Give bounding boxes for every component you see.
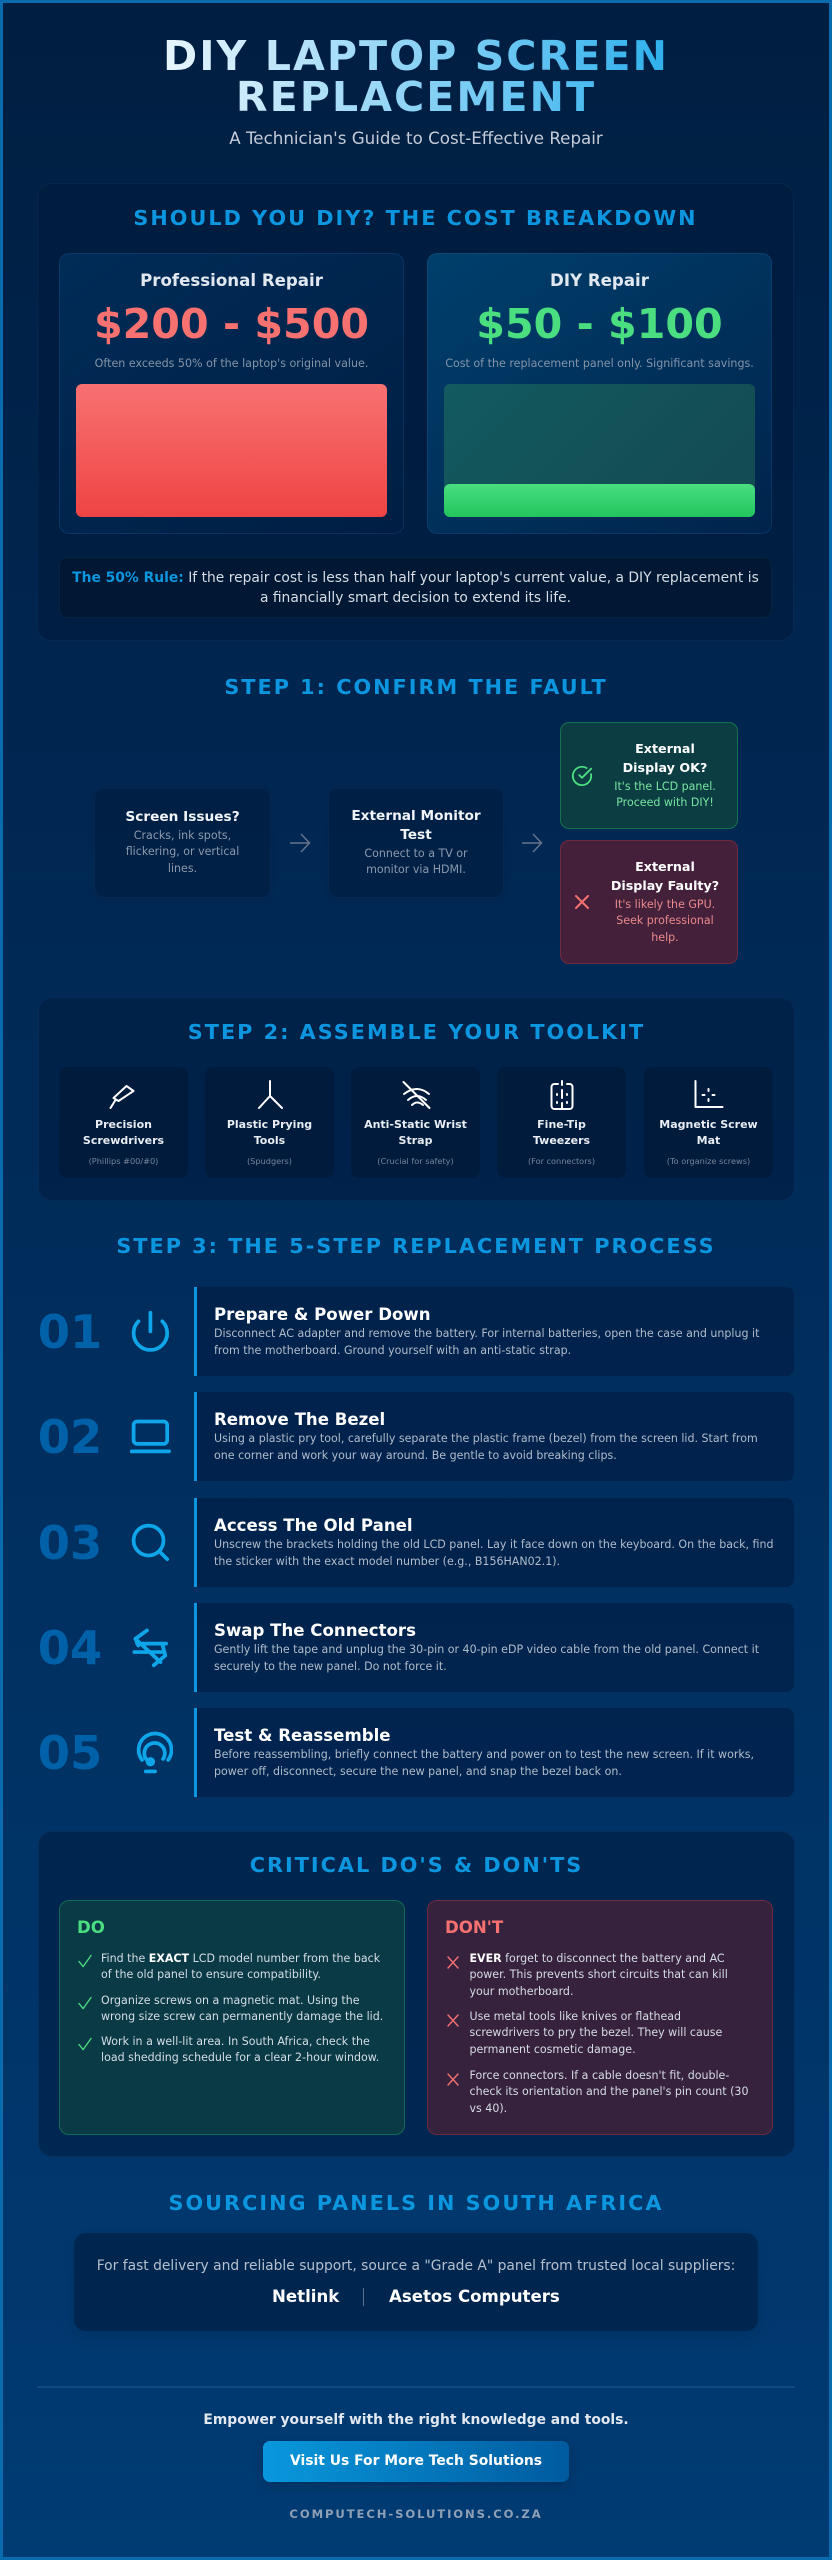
process step 4 xyxy=(38,1603,794,1692)
icon: cross xyxy=(575,895,589,909)
panel: suppliers xyxy=(74,2233,758,2331)
flow text: external monitor test: Test xyxy=(400,827,432,843)
do text 1: of the old panel to ensure compatibility. xyxy=(101,1968,321,1981)
panel: toolkit xyxy=(38,997,795,1201)
heading: step 2: STEP 2: ASSEMBLE YOUR TOOLKIT xyxy=(188,1020,645,1044)
icon: power xyxy=(132,1310,170,1352)
step description: Disconnect AC adapter and remove the battery. For internal batteries, open the case and unplug it xyxy=(214,1327,759,1340)
card: diy repair xyxy=(427,253,772,534)
tool name: Precision xyxy=(95,1118,152,1131)
price: diy: $50 - $100 xyxy=(476,300,723,348)
icon: connectors xyxy=(132,1628,168,1668)
do item 3 xyxy=(78,2034,398,2068)
step description xyxy=(214,1538,774,1568)
arrow xyxy=(522,834,542,852)
don't text 1 xyxy=(470,1951,728,2001)
icon: check circle xyxy=(572,766,592,786)
outcome text: display faulty: Display Faulty? xyxy=(611,878,719,893)
number: 04 xyxy=(38,1621,102,1675)
tool name: Plastic Prying xyxy=(227,1118,312,1131)
icon: wrist strap xyxy=(402,1081,430,1109)
icon: cross xyxy=(447,2014,459,2027)
tool: precision screwdrivers xyxy=(59,1067,188,1178)
do text 3 xyxy=(101,2034,379,2067)
icon: check xyxy=(78,1954,92,1968)
outcome text: display faulty: External xyxy=(635,859,695,874)
flow text: screen issues: lines. xyxy=(168,862,197,875)
icon: magnifier xyxy=(132,1524,170,1562)
card: professional repair xyxy=(59,253,404,534)
step description: Before reassembling, briefly connect the battery and power on to test the new screen. If it works, xyxy=(214,1748,754,1761)
do text 2: Organize screws on a magnetic mat. Using the xyxy=(101,1994,360,2007)
icon: laptop xyxy=(130,1420,171,1454)
step title: Swap The Connectors xyxy=(214,1620,416,1640)
don't text 2: permanent cosmetic damage. xyxy=(470,2043,636,2056)
tool name: Magnetic Screw xyxy=(659,1118,758,1131)
icon: screw mat xyxy=(694,1080,724,1108)
number: 01 xyxy=(38,1305,102,1359)
step description xyxy=(214,1432,758,1462)
outcome text: display ok: Proceed with DIY! xyxy=(616,796,714,809)
flow text: screen issues xyxy=(125,809,240,875)
bar: diy cost xyxy=(444,384,755,517)
bar: professional cost xyxy=(76,384,387,517)
outcome text: display ok: External xyxy=(635,741,695,756)
icon: prying tool xyxy=(258,1080,283,1109)
note: professional: Often exceeds 50% of the laptop's original value. xyxy=(95,357,368,370)
don't item 3 xyxy=(446,2068,766,2118)
tool: magnetic screw mat xyxy=(644,1067,773,1178)
do item 1 xyxy=(78,1952,380,1981)
tool: plastic prying tools xyxy=(205,1067,334,1178)
callout: 50% rule xyxy=(59,557,772,618)
tool name: Mat xyxy=(697,1134,720,1147)
don't text 3: vs 40). xyxy=(470,2102,507,2115)
sourcing text: For fast delivery and reliable support, source a "Grade A" panel from trusted local suppliers: xyxy=(97,2258,735,2274)
tagline: Empower yourself with the right knowledge and tools. xyxy=(203,2412,629,2428)
outcome text: display faulty: It's likely the GPU. xyxy=(615,898,715,911)
flowchart: confirm the fault xyxy=(95,722,738,964)
don't heading: DON'T xyxy=(445,1918,503,1937)
tool note: (Crucial for safety) xyxy=(377,1156,454,1166)
callout: 50% rule: The 50% Rule: If the repair cost is less than half your laptop's current value, a DIY replacement is xyxy=(72,570,759,586)
process step 3 xyxy=(38,1498,794,1587)
arrow xyxy=(290,834,310,852)
step title: Prepare & Power Down xyxy=(214,1304,431,1324)
tool note: (Spudgers) xyxy=(247,1156,292,1166)
tool name: Screwdrivers xyxy=(83,1134,164,1147)
number: 03 xyxy=(38,1516,102,1570)
supplier: asetos computers: Asetos Computers xyxy=(389,2287,560,2306)
number: 02 xyxy=(38,1410,102,1464)
icon: tweezers xyxy=(550,1080,574,1110)
flow text: screen issues: flickering, or vertical xyxy=(126,845,239,858)
step title: Remove The Bezel xyxy=(214,1410,385,1428)
tool note: (Phillips #00/#0) xyxy=(89,1156,158,1166)
outcome: display ok xyxy=(560,722,738,829)
do text 2: wrong size screw can permanently damage the lid. xyxy=(101,2010,383,2023)
tool name: Tools xyxy=(254,1134,285,1147)
website: COMPUTECH-SOLUTIONS.CO.ZA xyxy=(289,2507,543,2521)
bar fill: diy xyxy=(444,484,755,517)
footer xyxy=(37,2386,795,2526)
tool: anti-static wrist strap xyxy=(351,1067,480,1178)
outcome text: display ok xyxy=(614,741,716,809)
don't item 2 xyxy=(446,2009,766,2059)
step title: Test & Reassemble xyxy=(214,1726,391,1744)
title: REPLACEMENT xyxy=(236,73,596,121)
flow text: screen issues: Screen Issues? xyxy=(125,809,240,825)
flow text: external monitor test: External Monitor xyxy=(351,808,481,824)
tool name xyxy=(83,1118,164,1147)
do item 2 xyxy=(78,1994,383,2023)
tool name: Strap xyxy=(399,1134,432,1147)
outcome text: display faulty xyxy=(611,859,719,944)
icon: cross xyxy=(447,2073,459,2086)
tool name xyxy=(364,1118,467,1147)
step description: one corner and work your way around. Be gentle to avoid breaking clips. xyxy=(214,1449,617,1462)
flow text: external monitor test: monitor via HDMI. xyxy=(366,863,466,876)
process step 5 xyxy=(38,1708,794,1797)
step card xyxy=(194,1708,794,1797)
outcome: display faulty xyxy=(560,840,738,964)
don't text 1: power. This prevents short circuits that can kill xyxy=(470,1968,728,1981)
do heading: DO xyxy=(77,1918,105,1937)
icon: screwdriver xyxy=(110,1085,134,1109)
step title: Access The Old Panel xyxy=(214,1516,413,1534)
tool name: Anti-Static Wrist xyxy=(364,1118,467,1131)
step description xyxy=(214,1327,760,1357)
step description: Gently lift the tape and unplug the 30-pin or 40-pin eDP video cable from the old panel. Connect it xyxy=(214,1643,759,1656)
step description: Unscrew the brackets holding the old LCD panel. Lay it face down on the keyboard. On the back, find xyxy=(214,1538,774,1551)
icon: power test xyxy=(136,1732,173,1774)
heading: do's and don'ts: CRITICAL DO'S & DON'TS xyxy=(250,1853,583,1877)
do text 1: Find the EXACT LCD model number from the back xyxy=(101,1952,380,1965)
flow box: external monitor test xyxy=(328,788,504,898)
note: diy: Cost of the replacement panel only. Significant savings. xyxy=(445,357,754,370)
card title: Professional Repair xyxy=(140,271,323,290)
step card xyxy=(194,1392,794,1481)
don't text 3: check its orientation and the panel's pin count (30 xyxy=(470,2085,748,2098)
heading: step 1: STEP 1: CONFIRM THE FAULT xyxy=(224,675,608,699)
icon: check xyxy=(78,2037,92,2051)
tool name xyxy=(227,1118,312,1147)
icon: cross xyxy=(447,1956,459,1969)
step description xyxy=(214,1643,759,1673)
panel: do's and don'ts xyxy=(38,1831,795,2157)
tool note: (To organize screws) xyxy=(667,1156,750,1166)
step description xyxy=(214,1748,754,1778)
don't text 3: Force connectors. If a cable doesn't fit, double- xyxy=(470,2069,729,2082)
subtitle: A Technician's Guide to Cost-Effective Repair xyxy=(229,128,603,148)
tool name xyxy=(532,1118,590,1147)
flow text: screen issues: Cracks, ink spots, xyxy=(134,829,231,842)
do text 3: Work in a well-lit area. In South Africa, check the xyxy=(101,2035,370,2048)
step card xyxy=(194,1498,794,1587)
heading: step 3: STEP 3: THE 5-STEP REPLACEMENT PROCESS xyxy=(116,1234,716,1258)
title: DIY LAPTOP SCREEN xyxy=(163,32,669,80)
outcome text: display ok: Display OK? xyxy=(623,760,707,775)
don't text 3 xyxy=(470,2068,748,2118)
tool name xyxy=(659,1118,758,1147)
don't text 2: screwdrivers to pry the bezel. They will cause xyxy=(470,2026,722,2039)
tool name: Tweezers xyxy=(533,1134,590,1147)
step card xyxy=(194,1603,794,1692)
card title: DIY Repair xyxy=(550,271,649,290)
don't text 2: Use metal tools like knives or flathead xyxy=(470,2010,681,2023)
supplier: netlink: Netlink xyxy=(272,2287,339,2306)
footer divider line xyxy=(37,2386,795,2388)
tool: fine-tip tweezers xyxy=(497,1067,626,1178)
price: professional: $200 - $500 xyxy=(94,300,369,348)
button xyxy=(263,2441,569,2482)
tool name: Fine-Tip xyxy=(537,1118,586,1131)
outcome text: display faulty: help. xyxy=(651,931,679,944)
step card xyxy=(194,1287,794,1376)
heading: sourcing: SOURCING PANELS IN SOUTH AFRICA xyxy=(169,2191,663,2215)
panel: cost breakdown xyxy=(37,183,794,641)
separator xyxy=(363,2288,364,2306)
outcome text: display faulty: Seek professional xyxy=(616,914,714,927)
process step 2 xyxy=(38,1392,794,1481)
don't text 1: EVER forget to disconnect the battery and AC xyxy=(470,1952,725,1965)
button: Visit Us For More Tech Solutions xyxy=(290,2453,542,2469)
do text 1 xyxy=(101,1952,380,1981)
card: don't xyxy=(427,1900,773,2135)
heading: cost breakdown: SHOULD YOU DIY? THE COST BREAKDOWN xyxy=(133,206,698,230)
step description: securely to the new panel. Do not force it. xyxy=(214,1660,447,1673)
don't item 1 xyxy=(446,1951,766,2001)
flow text: external monitor test: Connect to a TV or xyxy=(364,847,468,860)
flow box: screen issues xyxy=(94,788,271,898)
title xyxy=(150,36,682,120)
process step 1 xyxy=(38,1287,794,1376)
step description: Using a plastic pry tool, carefully separate the plastic frame (bezel) from the screen lid. Start from xyxy=(214,1432,758,1445)
step description: power off, disconnect, secure the new panel, and snap the bezel back on. xyxy=(214,1765,622,1778)
callout: 50% rule: a financially smart decision to extend its life. xyxy=(260,590,571,606)
tool note: (For connectors) xyxy=(528,1156,595,1166)
do text 3: load shedding schedule for a clear 2-hour window. xyxy=(101,2051,379,2064)
don't text 1: your motherboard. xyxy=(470,1985,573,1998)
outcome text: display ok: It's the LCD panel. xyxy=(614,780,716,793)
number: 05 xyxy=(38,1726,102,1780)
card: do xyxy=(59,1900,405,2135)
icon: check xyxy=(78,1996,92,2010)
flow text: external monitor test xyxy=(351,808,481,876)
step description: from the motherboard. Ground yourself with an anti-static strap. xyxy=(214,1344,571,1357)
don't text 2 xyxy=(470,2009,722,2059)
do text 2 xyxy=(101,1994,383,2023)
step description: the sticker with the exact model number (e.g., B156HAN02.1). xyxy=(214,1555,560,1568)
